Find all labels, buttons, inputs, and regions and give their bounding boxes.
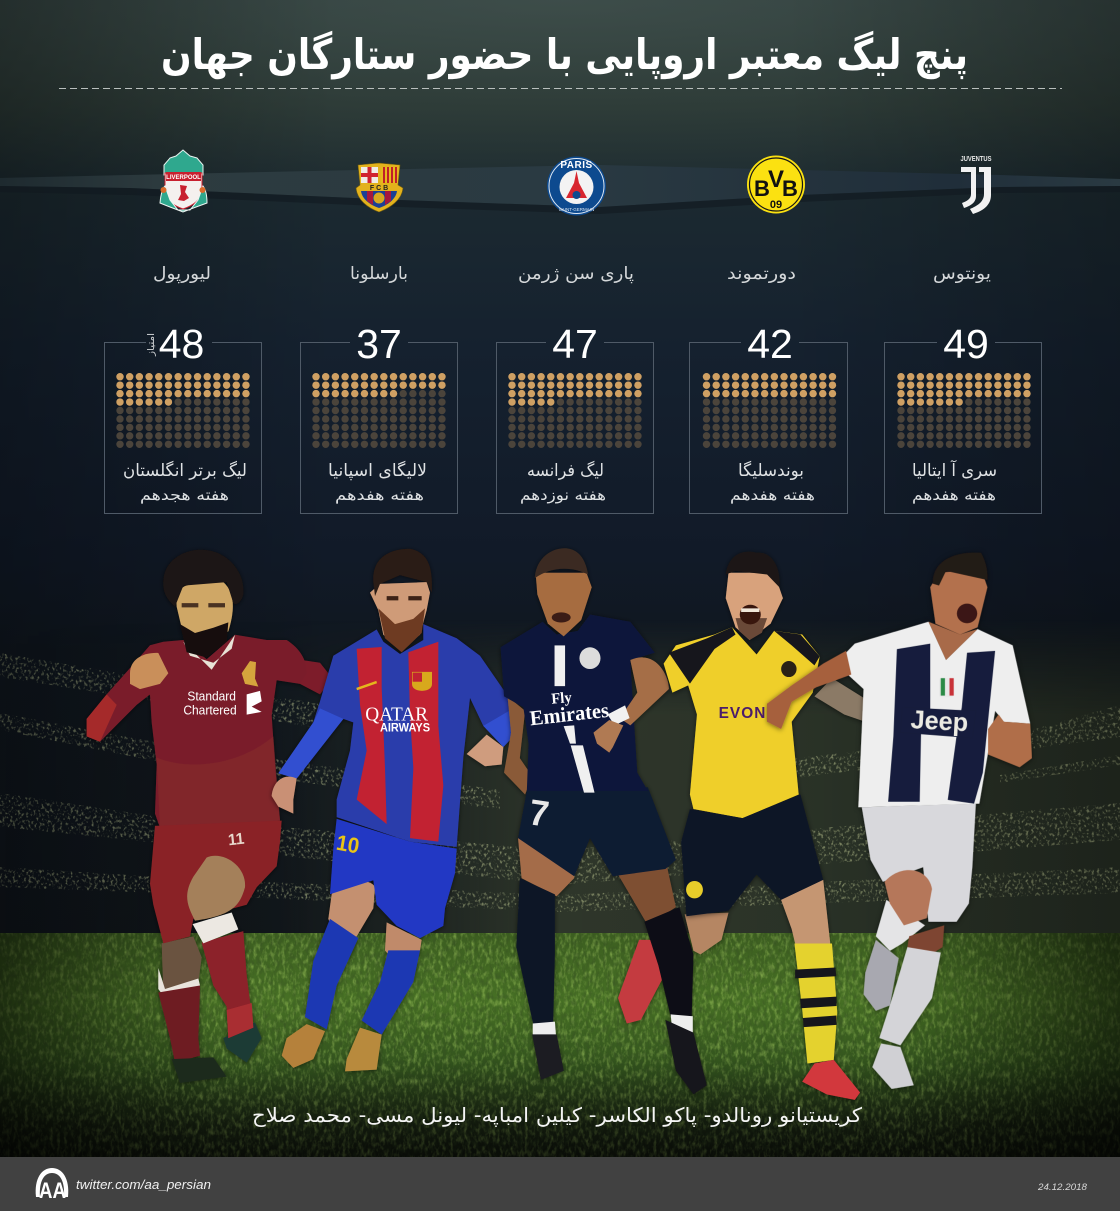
player: Messi (272, 549, 518, 1071)
stadium background (0, 0, 1120, 933)
logo: Borussia Dortmund: B (754, 176, 770, 201)
player: Mbappe and Alcacer rear leg: Fly (551, 690, 573, 708)
league and week: هفته هفدهم (912, 486, 996, 504)
grass field (0, 933, 1120, 1157)
panel: Serie A points (884, 321, 1042, 514)
logo: Paris Saint-Germain: SAINT-GERMAIN (559, 207, 594, 212)
logo: Liverpool (160, 150, 207, 212)
number: 49 points: 49 (943, 321, 989, 367)
team name: Dortmund: دورتموند (727, 264, 796, 284)
league and week: بوندسلیگا (738, 460, 804, 481)
player: Alcacer: EVONIK (719, 705, 784, 722)
league and week (123, 460, 247, 504)
logo: Borussia Dortmund: V (768, 166, 784, 193)
logo: Barcelona: F C B (370, 185, 388, 192)
player: Mbappe and Alcacer rear leg: Emirates (529, 700, 610, 730)
team name: Barcelona: بارسلونا (350, 264, 408, 284)
unit label: امتیاز (147, 333, 157, 357)
dot grid: 37 of 126 (312, 373, 446, 448)
dot grid: 48 of 126 (116, 373, 250, 448)
title divider (59, 88, 1062, 90)
logo: Paris Saint-Germain (547, 156, 606, 216)
number: 47 points: 47 (552, 321, 598, 367)
league and week (912, 459, 997, 504)
player names caption: کریستیانو رونالدو- پاکو الکاسر- کیلین امباپه- لیونل مسی- محمد صلاح (252, 1103, 863, 1128)
player: Messi: QATAR (365, 703, 429, 726)
league and week: لالیگای اسپانیا (328, 460, 427, 481)
number: 48 points: 48 (159, 321, 204, 367)
league and week: لیگ برتر انگلستان (123, 460, 247, 481)
league and week: سری آ ایتالیا (912, 459, 997, 481)
league and week: هفته هفدهم (730, 486, 815, 504)
player: Salah (87, 550, 328, 1083)
icon: Anadolu Agency logo: AA (39, 1178, 66, 1203)
player: Alcacer (664, 552, 867, 1100)
logo: Paris Saint-Germain: PARIS (560, 160, 593, 171)
player: Salah: Chartered (183, 703, 237, 718)
team names (153, 264, 991, 284)
player: Ronaldo: Jeep (910, 706, 969, 737)
icon: Anadolu Agency logo (36, 1168, 68, 1203)
player: Ronaldo (767, 553, 1032, 1089)
social handle: twitter.com/aa_persian (76, 1177, 211, 1192)
logo: Juventus (960, 156, 992, 214)
league and week: هفته هجدهم (140, 486, 229, 504)
panel: Premier League points (104, 321, 262, 514)
logo: Barcelona (356, 163, 403, 212)
league and week (520, 460, 606, 504)
team name: Liverpool: لیورپول (153, 264, 211, 284)
number: 42 points: 42 (747, 321, 793, 367)
player: Mbappe and Alcacer rear leg (501, 548, 729, 1094)
logo: Borussia Dortmund: B (782, 176, 798, 201)
panel: Bundesliga points (690, 321, 848, 514)
dot grid: 42 of 126 (703, 373, 836, 448)
player: Salah: 11 (227, 830, 245, 849)
logo: Liverpool: LIVERPOOL (166, 175, 201, 181)
light band behind logos (0, 165, 1120, 214)
player: Mbappe and Alcacer rear leg: 7 (527, 792, 551, 835)
panel: Ligue 1 points (496, 321, 654, 514)
title: پنچ لیگ معتبر اروپایی با حضور ستارگان جهان (161, 30, 968, 80)
number: 37 points: 37 (356, 321, 402, 367)
date: 24.12.2018 (1037, 1182, 1088, 1193)
league and week (328, 460, 427, 504)
dot grid: 47 of 126 (508, 373, 642, 448)
logo: Borussia Dortmund: 09 (770, 199, 782, 211)
footer bar (0, 1157, 1120, 1211)
league and week: هفته هفدهم (335, 486, 424, 504)
league and week: لیگ فرانسه (527, 460, 604, 481)
panel: La Liga points (300, 321, 458, 514)
dot grid: 49 of 126 (897, 373, 1031, 448)
team name: Juventus: یونتوس (933, 264, 991, 284)
logo: Borussia Dortmund (747, 156, 805, 214)
player: Messi: 10 (335, 831, 361, 859)
player: Messi: AIRWAYS (380, 722, 430, 735)
logo: Juventus: JUVENTUS (960, 156, 992, 163)
league and week (730, 460, 815, 504)
team name: PSG: پاری سن ژرمن (518, 264, 634, 284)
player: Salah: Standard (187, 689, 236, 704)
league and week: هفته نوزدهم (520, 486, 606, 504)
